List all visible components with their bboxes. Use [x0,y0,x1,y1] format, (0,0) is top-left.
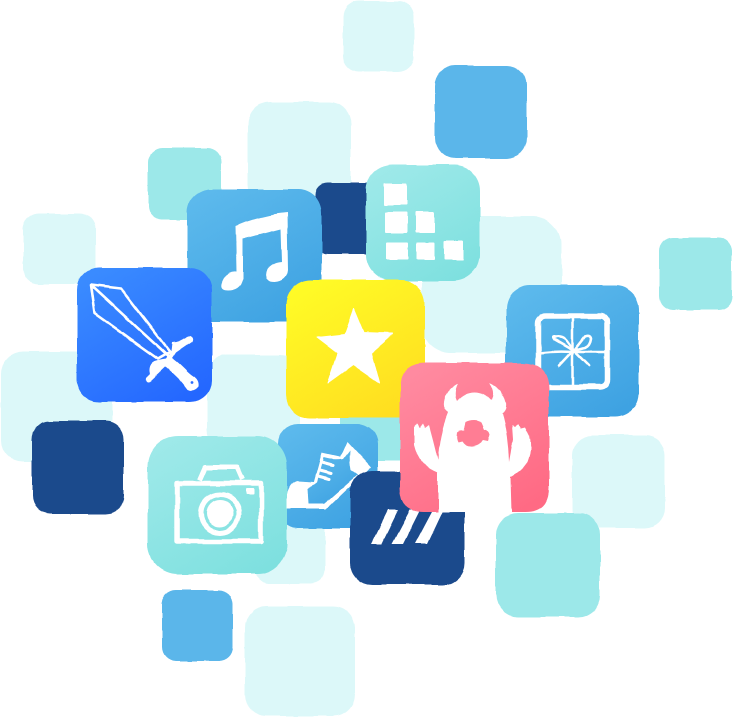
icon: monster [400,363,549,512]
icon: gift box [506,285,639,417]
icon: star [286,280,425,418]
icon: three stripes [350,471,465,585]
icon: sword [77,268,212,402]
icon: sneaker [278,424,378,528]
icon: camera [148,436,287,574]
icon: grid of squares [366,165,480,281]
icon: music note [187,189,322,322]
